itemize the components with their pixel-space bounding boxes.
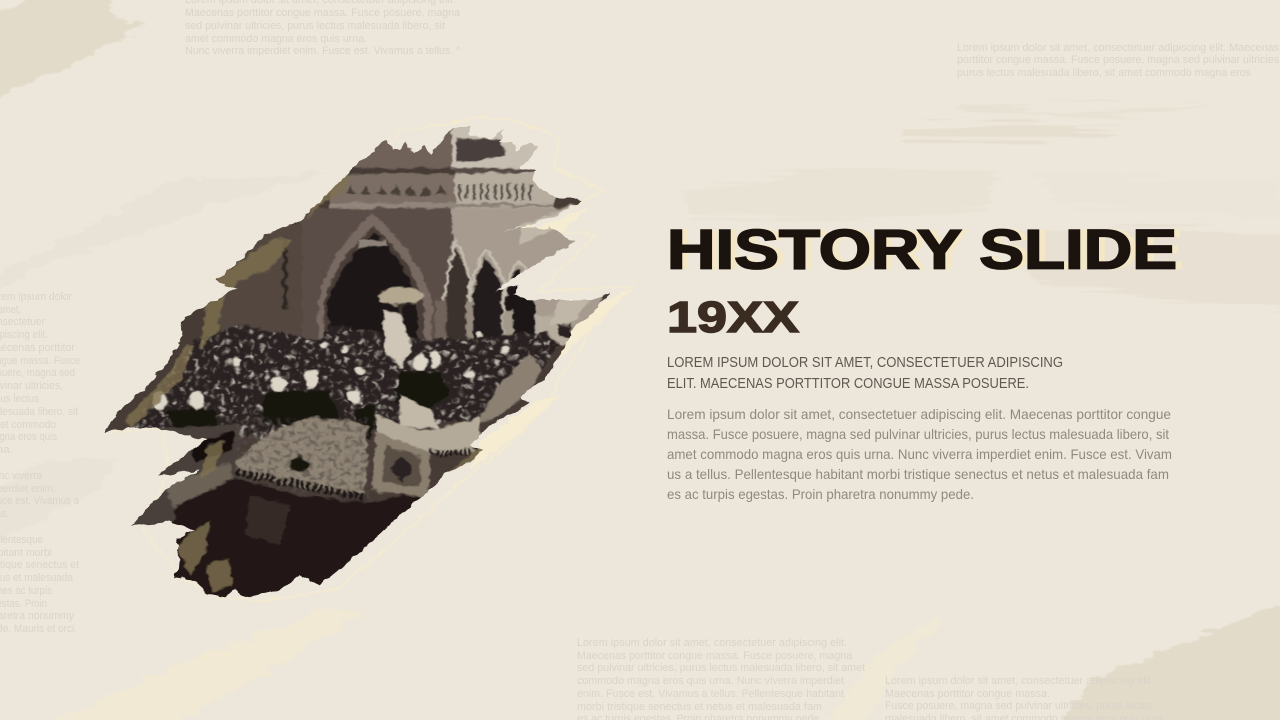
lower floor <box>106 424 241 518</box>
right frieze <box>455 168 555 209</box>
body paragraph: Lorem ipsum dolor sit amet, consectetuer adipiscing elit. Maecenas porttitor congue <box>667 406 1171 422</box>
ghost text: bottom centre: commodo magna eros quis urna. Nunc viverra imperdiet <box>577 675 844 687</box>
light cushion <box>400 395 440 430</box>
left howdah <box>236 418 370 498</box>
subheading <box>667 355 1063 392</box>
title: HISTORY SLIDE <box>673 218 1183 280</box>
lighter figures at right <box>478 352 542 425</box>
ghost text: top right: Lorem ipsum dolor sit amet, consectetuer adipiscing elit. Maecenas <box>957 42 1279 54</box>
parapet top <box>352 126 538 170</box>
ghost text: top left: amet commodo magna eros quis urna. <box>185 33 367 45</box>
left frieze <box>330 168 455 208</box>
ghost text: bottom centre <box>577 637 865 720</box>
pale yellow brush outline behind photo <box>114 117 632 601</box>
body paragraph: amet commodo magna eros quis urna. Nunc viverra imperdiet enim. Fusce est. Vivam <box>667 446 1172 462</box>
ghost text: top right: purus lectus malesuada libero, sit amet commodo magna eros <box>957 67 1251 79</box>
ghost text: bottom centre: sed pulvinar ultricies, purus lectus malesuada libero, sit amet <box>577 662 865 674</box>
body paragraph: es ac turpis egestas. Proin pharetra nonummy pede. <box>667 486 974 502</box>
photo base wall <box>105 126 610 504</box>
ghost text: top left: Maecenas porttitor congue massa. Fusce posuere, magna <box>185 7 461 19</box>
ghost text: top left: Nunc viverra imperdiet enim. Fusce est. Vivamus a tellus. ^ <box>185 45 462 57</box>
ghost text: bottom right: Lorem ipsum dolor sit amet, consectetuer adipiscing elit. <box>885 675 1154 687</box>
ceremonial umbrella <box>379 287 423 318</box>
crowd mass <box>130 308 560 440</box>
ghost text: bottom centre: Lorem ipsum dolor sit amet, consectetuer adipiscing elit. <box>577 637 847 649</box>
main arch <box>318 214 432 345</box>
right howdah <box>372 414 480 497</box>
year heading: 19XX <box>667 293 799 342</box>
ghost text: bottom right: Fusce posuere, magna sed pulvinar ultricies, purus lectus <box>885 700 1153 712</box>
side arcade arches <box>435 242 572 345</box>
ghost text: bottom right <box>885 675 1164 720</box>
subheading: LOREM IPSUM DOLOR SIT AMET, CONSECTETUER ADIPISCING <box>667 355 1063 371</box>
pale wash at right tips <box>520 205 590 325</box>
ghost text: left column <box>0 291 80 635</box>
elephant blanket <box>245 495 290 545</box>
title: HISTORY SLIDE <box>667 218 1177 280</box>
seated dark figures <box>165 372 450 445</box>
brick facade <box>300 208 452 348</box>
light right wall <box>451 208 601 343</box>
ghost text: top left <box>185 0 462 57</box>
dark elephant bodies <box>172 477 436 598</box>
gold paint overlays <box>125 160 505 592</box>
body paragraph <box>667 406 1172 502</box>
subheading: ELIT. MAECENAS PORTTITOR CONGUE MASSA POSUERE. <box>667 376 1029 392</box>
ghost text: bottom centre: Maecenas porttitor congue massa. Fusce posuere, magna <box>577 650 853 662</box>
white turbans <box>153 332 509 409</box>
body paragraph: us a tellus. Pellentesque habitant morbi tristique senectus et netus et malesuada fam <box>667 466 1169 482</box>
ghost text: bottom right: Maecenas porttitor congue massa. <box>885 688 1050 700</box>
ghost text: bottom centre: morbi tristique senectus et netus et malesuada fam <box>577 701 822 713</box>
ghost text: top left: sed pulvinar ultricies, purus lectus malesuada libero, sit <box>185 20 445 32</box>
ghost text: bottom centre: enim. Fusce est. Vivamus a tellus. Pellentesque habitant <box>577 688 844 700</box>
ghost text: top right <box>957 42 1280 79</box>
body paragraph: massa. Fusce posuere, magna sed pulvinar ultricies, purus lectus malesuada libero, sit <box>667 426 1169 442</box>
brush-masked historical photograph <box>104 126 610 598</box>
